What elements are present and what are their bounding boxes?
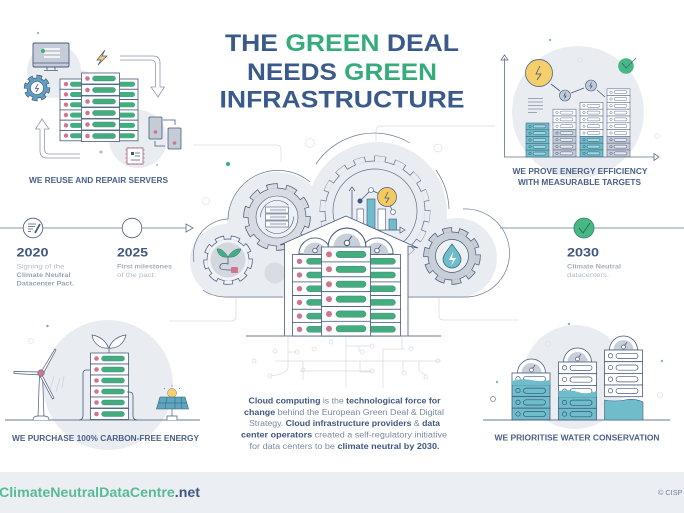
icon: chip — [125, 147, 145, 165]
green dot — [226, 162, 230, 166]
decorative dots — [37, 32, 158, 166]
decorative grey disc — [264, 262, 286, 284]
body text: Strategy. Cloud infrastructure providers & data — [249, 419, 441, 428]
title: INFRASTRUCTURE — [220, 86, 464, 114]
milestone 2020 text: 2020 — [16, 246, 49, 260]
icon: text lines — [528, 98, 543, 112]
label: WE REUSE AND REPAIR SERVERS — [29, 176, 169, 185]
icon: leaves — [92, 335, 126, 353]
trend line — [551, 84, 605, 97]
background circle — [512, 46, 644, 178]
label: WE PROVE ENERGY EFFICIENCY — [512, 167, 648, 176]
icon: green check milestone — [574, 218, 594, 238]
background circle — [43, 320, 173, 450]
server stack 2 — [558, 362, 596, 420]
bar 2 — [553, 109, 576, 157]
panel: water conservation — [483, 323, 670, 442]
milestone 2020 text: Signing of the — [16, 264, 65, 270]
bar 1 — [526, 123, 549, 157]
server stack back — [60, 79, 138, 141]
arrow: down — [120, 56, 164, 97]
server stack 3 — [604, 350, 643, 420]
server stack — [90, 353, 128, 420]
icon: solar panel — [156, 385, 188, 420]
panel: central cloud — [190, 133, 510, 388]
milestone 2020 text: Datacenter Pact. — [16, 280, 74, 288]
label: WE PURCHASE 100% CARBON-FREE ENERGY — [12, 434, 200, 443]
background circle — [523, 325, 627, 429]
gauges — [299, 228, 393, 254]
footer copyright: © CISP — [658, 488, 683, 497]
icon: green check — [618, 58, 636, 74]
ground line — [483, 419, 670, 421]
panel: reuse and repair servers — [26, 32, 181, 185]
icon: small servers — [149, 117, 181, 149]
gear: plant — [206, 238, 250, 282]
milestone 2030 text — [567, 246, 621, 279]
footer url: ClimateNeutralDataCentre.net — [0, 484, 200, 500]
milestone 2025 icon — [122, 218, 142, 238]
label: WITH MEASURABLE TARGETS — [518, 178, 642, 187]
milestone 2025 text — [117, 246, 173, 279]
gear: chart — [322, 158, 428, 264]
decorative — [578, 58, 659, 138]
power cables — [79, 370, 138, 420]
connector lines — [169, 126, 518, 321]
arrow head — [186, 224, 193, 232]
ground line — [5, 419, 200, 421]
milestone 2020 text: Climate Neutral — [16, 272, 71, 279]
label: WE PRIORITISE WATER CONSERVATION — [494, 434, 660, 442]
milestone 2025 text: of the pact. — [117, 272, 156, 279]
cloud outline — [193, 133, 510, 297]
server stack front — [82, 73, 120, 142]
body text: for data centers to be climate neutral by 2030. — [250, 442, 440, 451]
milestone 2025 text: 2025 — [117, 246, 148, 260]
label — [512, 167, 648, 187]
server stack back — [292, 254, 400, 336]
server stack 1 — [512, 373, 550, 420]
cloud shape — [190, 142, 497, 298]
decorative — [546, 342, 662, 398]
dots — [496, 323, 663, 383]
title — [220, 30, 464, 114]
title: THE GREEN DEAL — [225, 30, 459, 57]
title: NEEDS GREEN — [247, 59, 437, 86]
small circle — [490, 396, 496, 402]
body text: Cloud computing is the technological force for — [248, 396, 440, 406]
icon: energy coin large — [526, 60, 552, 86]
gear: water — [426, 230, 478, 282]
icon: monitor — [33, 43, 69, 70]
milestone 2030 text: datacenters. — [567, 272, 609, 279]
milestone 2025 text: First milestones — [117, 264, 173, 270]
milestone 2030 text: 2030 — [567, 246, 599, 260]
milestone 2020 text — [16, 246, 74, 288]
chart axes — [501, 55, 659, 160]
floor line — [246, 335, 441, 337]
gauge tops — [518, 336, 638, 373]
body text: change behind the European Green Deal & Digital — [244, 408, 444, 417]
gear: servers — [246, 186, 308, 248]
timeline left — [0, 218, 193, 238]
panel: carbon-free energy — [5, 320, 200, 450]
house — [280, 216, 418, 336]
bar 4 — [607, 89, 630, 157]
server stack front — [322, 247, 370, 336]
body text — [241, 396, 448, 451]
arrow: up — [36, 119, 80, 158]
milestone 2020 icon — [23, 218, 43, 238]
icon: wind turbine — [14, 349, 64, 420]
decorative circles — [202, 138, 442, 204]
milestone 2030 text: Climate Neutral — [567, 264, 621, 270]
timeline right — [500, 218, 684, 238]
background blobs — [27, 44, 167, 168]
body text: center operators created a self-regulatory initiative — [241, 430, 448, 440]
panel: prove energy efficiency — [501, 39, 659, 187]
bar 3 — [580, 102, 603, 157]
dot — [46, 325, 49, 327]
circuit lines — [252, 337, 441, 388]
icon: energy coin small — [560, 80, 596, 101]
icon: lightning — [97, 50, 107, 65]
decorative — [28, 338, 34, 344]
icon: gear — [26, 77, 48, 99]
dot — [549, 39, 551, 41]
footer band — [0, 472, 684, 513]
